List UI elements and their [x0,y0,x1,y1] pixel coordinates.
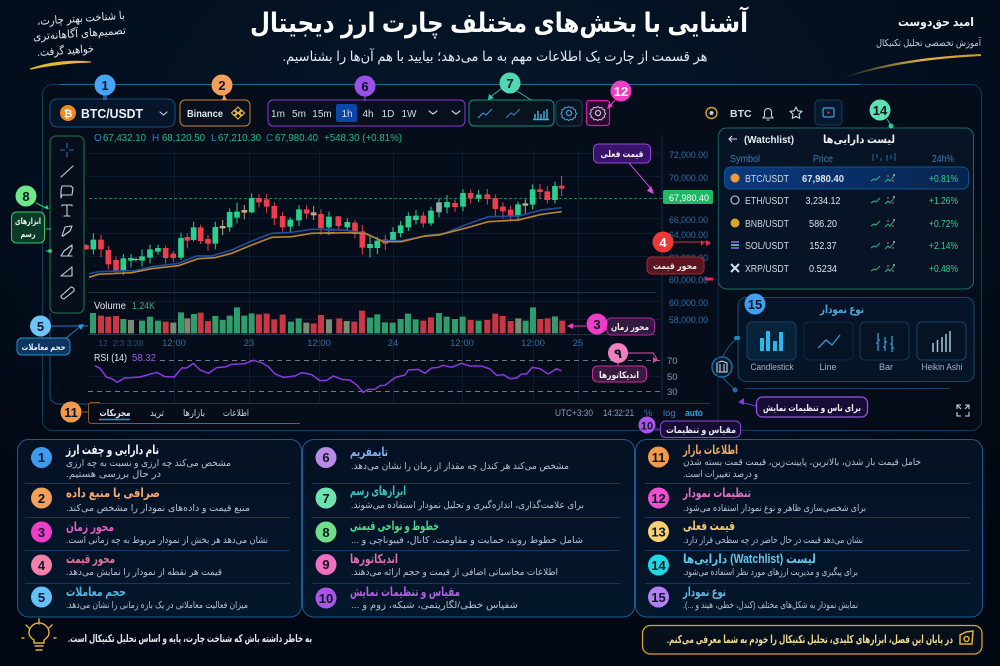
row BNB: 586.20 [809,219,837,230]
panel: legend 11-15 [636,440,982,617]
pair selector: BTC/USDT [81,106,143,121]
top right toolbar icons [706,100,842,125]
candlestick chart [86,176,562,277]
market info line: 68,120.50 [162,133,205,144]
callout: current price [594,144,654,194]
marker 6 [354,76,376,101]
item 2 [31,486,250,514]
volume label: 1.24K [132,301,155,312]
item 11: 11 [652,450,665,465]
item 4: 4 [38,558,46,573]
author [876,15,981,49]
author: آموزش تخصصی تحلیل تکنیکال [876,36,981,49]
panel: watchlist: Price [813,154,833,165]
price axis: 66,000.00 [669,215,708,226]
row XRP: +0.48% [929,264,958,275]
marker 4 and label: 4 [659,235,667,250]
timeframe selector: 15m [312,109,332,120]
card: heikin ashi: Heikin Ashi [922,362,962,372]
icon: pen [61,245,72,256]
marker 8 and callout [12,186,52,253]
card: heikin ashi [917,322,966,372]
price axis: 58,000.00 [669,315,708,326]
panel: watchlist [718,128,974,289]
item 13: قیمت فعلی [683,519,735,533]
item 4: قیمت هر نقطه از نمودار را نمایش می‌دهد. [66,567,222,578]
item 11: و درصد تغییرات است. [683,469,758,480]
status bar values [555,408,703,419]
icon: ruler [61,267,72,276]
status bar values: log [663,408,676,419]
marker 15: 15 [748,297,762,312]
marker 12 [607,80,632,109]
marker 9 and label: اندیکاتورها [599,370,639,381]
card: candlestick [747,322,796,372]
volume label [94,301,155,312]
chart grid [88,150,660,403]
timeframe selector: 4h [362,109,374,120]
item 12: برای شخصی‌سازی ظاهر و نوع نمودار استفاده می‌شود. [683,503,866,514]
item 5 [31,585,248,611]
price axis: 72,000.00 [669,150,708,161]
top right toolbar icons: BTC [730,108,752,120]
price axis: 70 [667,356,678,367]
divider line [745,388,950,390]
card: candlestick: Candlestick [750,362,794,372]
exchange selector [180,100,250,126]
marker 2: 2 [218,78,226,93]
panel: watchlist: لیست دارایی‌ها [823,134,895,146]
market info line: O [94,133,102,144]
panel: legend 6-10 [302,440,634,617]
RSI panel: RSI (14) [94,353,127,364]
card: bar [860,322,909,372]
timeframe selector: 5m [292,109,306,120]
item 10: شفپاس خطی/لگاریتمی، شبکه، زوم و ... [351,599,518,611]
item 10 [316,585,518,611]
item 6 [316,445,569,472]
row SOL: SOL/USDT [745,241,789,252]
timeframe selector: 1D [382,109,394,120]
row XRP [731,264,958,275]
current price tag: 67,980.40 [669,193,709,204]
connector: chart type to icon [712,336,740,392]
icon: text tool [62,205,72,216]
item 15: نوع نمودار [682,585,726,599]
item 5: حجم معاملات [66,585,126,599]
panel: drawing tools [50,136,84,313]
marker 1 [94,74,116,100]
time axis: 12:00 [521,338,545,349]
icon: light bulb [22,619,56,650]
marker 10 and label: 10 [641,420,653,432]
item 1 [31,443,231,480]
marker 4 and label [647,232,713,279]
item 1: نام دارایی و چفت ارز [65,443,159,458]
row BNB: BNB/USDT [745,219,789,230]
item 13: 13 [651,524,666,540]
icon: fullscreen [952,400,974,421]
market info line: 67,210.30 [218,133,261,144]
marker 5 and callout: حجم معاملات [22,342,66,352]
market info line: L [211,133,217,144]
item 14: برای پیگیری و مدیریت ارزهای مورد نظر استفاده می‌شود. [683,566,858,578]
item 6: تایمفریم [350,445,388,459]
item 3: محور زمان [66,520,114,534]
row BNB: +0.72% [929,219,958,230]
card: line [804,322,853,372]
marker 14 [870,100,894,128]
row BTC: 67,980.40 [802,174,844,185]
time axis: 12:00 [450,338,474,349]
callout: display settings [738,397,868,417]
item 1: 1 [38,450,45,465]
marker 3 and label [567,314,654,335]
marker 10 and label: مقیاس و تنظیمات [666,425,736,436]
item 2: منبع قیمت و داده‌های نمودار را مشخص می‌کند. [66,503,250,514]
blue bracket line [50,313,90,404]
card: bar: Bar [879,362,893,372]
marker 1: 1 [101,78,109,93]
time axis: 12 [99,339,108,348]
row ETH [731,196,958,207]
row SOL [731,241,958,252]
price axis: 64,000.00 [669,230,708,241]
item 12 [648,486,866,514]
marker 2 [212,74,232,100]
row BTC: BTC/USDT [745,174,789,185]
row ETH: 3,234.12 [806,196,841,207]
row BNB [730,218,958,230]
RSI panel: 58.32 [132,353,156,364]
bottom bar [88,402,300,424]
marker 11 [60,402,88,422]
time axis: 2:3 3:38 [113,338,144,348]
marker 12: 12 [614,84,628,99]
row SOL: +2.14% [929,241,958,252]
item 8 [316,519,583,546]
item 12: تنظیمات نمودار [682,486,751,500]
marker 8 and callout: رسم [20,229,36,240]
item 6: مشخص می‌کند هر کندل چه مقدار از زمان را نشان می‌دهد. [351,461,569,472]
timeframe selector: 1W [402,109,417,120]
marker 9 and label [592,343,658,382]
row ETH: ETH/USDT [745,196,789,207]
exchange selector: Binance [187,108,223,120]
item 14 [648,552,858,578]
item 11: خامل قیمت باز شدن، بالاترین، پایینت‌زین، قیمت قمت بسته شدن [683,457,921,468]
item 1: در حال بررسی هستیم. [66,469,161,480]
status bar values: auto [685,408,703,419]
drawing quick tools [469,100,554,126]
top-left note: خواهید گرفت. [37,42,94,59]
item 6: 6 [322,450,330,465]
panel: chart type: نوع نمودار [819,304,864,316]
item 7: ابزارهای رسم [350,484,406,498]
marker 3 and label: 3 [593,317,601,332]
time axis: 25 [573,338,583,349]
market info line: +548.30 (+0.81%) [324,133,402,144]
volume label: Volume [94,301,126,312]
item 15: نمایش نمودار به شکل‌های مختلف (کندل، خطی، هیند و ...). [683,600,858,611]
settings gear highlighted [586,100,610,126]
market info line: H [152,133,159,144]
panel: watchlist: Symbol [730,154,760,165]
marker 3 and label: محور زمان [611,322,649,333]
panel: watchlist: (Watchlist) [744,134,794,146]
market info line: 67,432.10 [103,133,146,144]
RSI panel [88,353,662,392]
price axis: 62,000.00 [669,253,708,264]
gold swoosh right [840,54,981,79]
item 1: مشخص می‌کند چه ارزی و نسبت به چه ارزی [66,458,231,469]
time axis: 23 [244,338,254,349]
item 10: مقیاس و تنظیمات نمایش [350,585,460,599]
price axis [667,150,708,398]
price axis: 30 [667,387,678,398]
top-left note: تصمیم‌های آگاهانه‌تری [32,23,126,43]
subtitle: هر قسمت از چارت یک اطلاعات مهم به ما می‌دهد؛ بیایید با هم آن‌ها را بشناسیم. [282,48,708,65]
icon: path tool [62,226,72,236]
item 2: 2 [38,491,45,506]
icon: crosshair [60,143,74,157]
item 2: صرافی یا منبع داده [66,486,160,500]
timeframe selector [268,100,465,126]
marker 8 and callout: 8 [22,189,30,204]
marker 7: 7 [506,76,514,91]
item 8: خطوط و نواحی قیمتی [350,519,439,533]
marker 5 and callout [17,316,88,355]
row BTC [730,174,958,185]
item 9: اطلاعات محاسباتی اضافی از قیمت و حجم ارائه می‌دهند. [351,567,558,578]
icon: comment [61,186,73,198]
item 7: برای علامت‌گذاری، اندازه‌گیری و تحلیل نمودار استفاده می‌شوند. [351,499,584,511]
item 13 [648,519,863,546]
time axis: 12:00 [162,338,186,349]
status bar values: % [644,408,653,419]
timeframe selector: 1h [341,109,353,120]
top-left note: با شناخت بهتر چارت، [37,10,125,28]
marker 4 and label: محور قیمت [653,261,697,272]
item 9 [316,552,558,578]
item 15: 15 [651,590,666,605]
current price tag [663,190,713,204]
callout: display settings: برای ناس و تنظیمات نمایش [763,403,861,414]
item 7: 7 [322,491,330,506]
price axis: 50 [667,372,678,383]
volume bars [93,307,562,333]
item 3: نشان می‌دهد هر بخش از نمودار مربوط به چه زمانی است. [66,535,268,546]
item 3 [31,520,268,546]
callout: current price: قیمت فعلی [600,149,644,159]
item 7 [316,484,584,511]
item 11 [648,443,921,480]
pair selector [50,99,175,127]
item 11: اطلاعات بازار [682,443,738,457]
panel: chart type [738,298,974,382]
item 9: اندیکاتورها [350,552,398,566]
item 9: 9 [322,557,330,572]
marker 5 and callout: 5 [37,319,44,334]
row BTC: +0.81% [929,174,958,185]
icon: trend line [61,166,73,177]
marker 15 [744,294,766,314]
item 8: 8 [322,525,330,540]
item 10: 10 [319,591,333,606]
pair selector: ₿ [64,108,73,120]
marker 8 and callout: ابزارهای [15,216,41,227]
item 5: میزان فعالیت معاملاتی در یک بازه زمانی را نشان می‌دهد. [66,600,248,611]
marker 7 [488,72,531,100]
top-left note [32,10,127,59]
price axis: 60,000.00 [669,275,708,286]
timeframe selector: 1m [271,109,285,120]
item 4: محور قیمت [66,552,115,566]
status bar values: 14:32:21 [603,408,634,419]
reminder text: به خاطر داشته باش که شناخت چارت، پایه و اساس تحلیل تکنیکال است. [68,633,312,645]
panel: watchlist: 24h% [932,154,954,165]
title: آشنایی با بخش‌های مختلف چارت ارز دیجیتال [250,6,749,39]
current price dashed line [89,198,663,200]
market info line [94,133,402,144]
gold swoosh left [30,61,91,69]
bottom bar: بازارها [183,408,205,419]
item 8: شامل خطوط روند، حمایت و مقاومت، کانال، فیبوناچی و ... [351,535,583,546]
price axis: 60,000.00 [669,298,708,309]
bottom bar: مجزبکات [100,408,131,419]
chart settings gear [556,100,582,126]
status bar values: UTC+3:30 [555,408,593,419]
card: line: Line [819,362,837,372]
panel: legend 1-5 [18,440,302,617]
item 3: 3 [38,525,45,540]
author: امید حق‌دوست [898,15,974,30]
icon: target [960,631,973,644]
marker 10 and label [638,416,740,438]
marker 6: 6 [361,79,369,94]
panel: main chart frame [42,84,982,430]
item 5: 5 [38,590,45,605]
marker 9 and label: ۹ [614,346,622,361]
panel: closing note [642,626,982,654]
time axis [99,338,583,349]
item 15 [648,585,858,611]
marker 11: 11 [64,405,78,420]
item 14: لیست (Watchlist) دارایی‌ها [683,552,816,566]
market info line: 67,980.40 [275,133,318,144]
time axis: 12:00 [307,338,331,349]
item 14: 14 [651,558,666,573]
item 12: 12 [651,491,666,506]
marker 14: 14 [873,103,888,118]
bottom bar: اطلاعات [223,408,249,419]
bottom bar: ترید [150,408,164,419]
row ETH: +1.26% [929,196,958,207]
item 4 [31,552,222,578]
time axis: 24 [388,338,398,349]
chart separators [88,135,710,404]
market info line: C [266,133,273,144]
row XRP: 0.5234 [809,264,837,275]
item 13: نشان می‌دهد قیمت در حال حاضر در چه سطحی قرار دارد. [683,535,863,546]
row XRP: XRP/USDT [745,264,789,275]
row SOL: 152.37 [810,241,837,252]
icon: pin [61,287,74,299]
price axis: 70,000.00 [669,173,708,184]
